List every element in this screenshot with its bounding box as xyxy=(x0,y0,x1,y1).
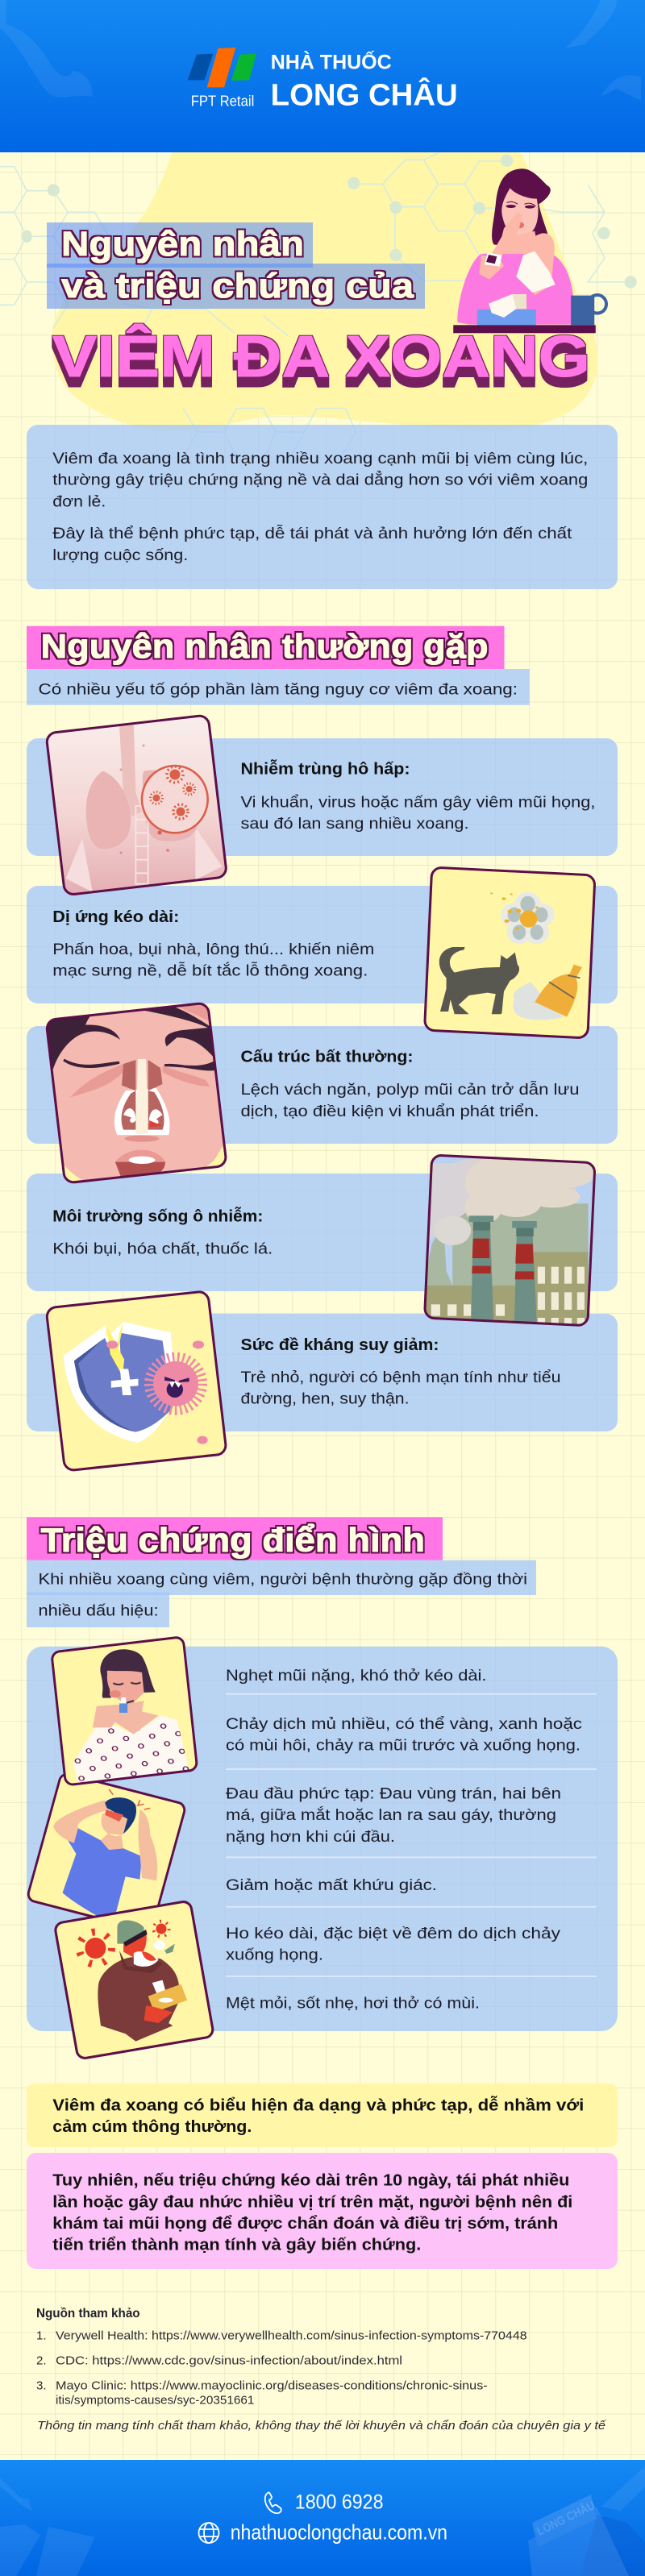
cause 2 text xyxy=(52,908,374,980)
symptoms lead-in xyxy=(27,1560,536,1627)
cause 3 text: dịch, tạo điều kiện vi khuẩn phát triển. xyxy=(240,1103,539,1120)
symptom: smell loss: Giảm hoặc mất khứu giác. xyxy=(226,1876,437,1894)
cause 4 text: Khói bụi, hóa chất, thuốc lá. xyxy=(52,1240,273,1258)
icon: infected lungs xyxy=(45,714,227,895)
cause 1 text: sau đó lan sang nhiều xoang. xyxy=(240,815,469,833)
callout: pink warning xyxy=(27,2153,618,2269)
callout: pink warning: khám tai mũi họng để được chẩn đoán và điều trị sớm, tránh xyxy=(52,2215,558,2233)
brand name: LONG CHÂU xyxy=(271,77,458,113)
references: 2. xyxy=(36,2354,47,2368)
cause 2 text: Dị ứng kéo dài: xyxy=(52,908,179,926)
causes lead-in: Có nhiều yếu tố góp phần làm tăng nguy cơ viêm đa xoang: xyxy=(39,681,518,699)
cause 3 text: Cấu trúc bất thường: xyxy=(240,1048,413,1066)
icon: woman using nasal spray xyxy=(51,1636,198,1786)
callout: yellow note: cảm cúm thông thường. xyxy=(52,2118,252,2136)
brand name xyxy=(271,50,458,113)
symptom: headache: nặng hơn khi cúi đầu. xyxy=(226,1828,395,1846)
symptom: headache: má, giữa mắt hoặc lan ra sau gáy, thường xyxy=(226,1805,556,1824)
title line 1: Nguyên nhân xyxy=(61,225,304,264)
heading: causes: Nguyên nhân thường gặp xyxy=(40,627,489,665)
heading: symptoms: Triệu chứng điển hình xyxy=(40,1521,425,1559)
cause 4 text xyxy=(52,1207,273,1258)
callout: pink warning: lần hoặc gây đau nhức nhiều vị trí trên mặt, người bệnh nên đi xyxy=(52,2193,572,2211)
intro text: thường gây triệu chứng nặng nề và dai dẳng hơn so với viêm xoang xyxy=(52,470,588,489)
phone number: 1800 6928 xyxy=(295,2491,384,2514)
decorative store: LONG CHÂU xyxy=(535,2498,597,2539)
symptom: cough xyxy=(226,1925,560,1964)
references xyxy=(36,2307,607,2433)
symptoms lead-in: Khi nhiều xoang cùng viêm, người bệnh thường gặp đồng thời xyxy=(39,1571,527,1589)
symptom: headache xyxy=(226,1785,561,1846)
cause 5 text xyxy=(240,1336,561,1408)
cause 3 text: Lệch vách ngăn, polyp mũi cản trở dẫn lưu xyxy=(240,1080,579,1099)
hexagon network decoration xyxy=(0,153,637,470)
title highlight boxes xyxy=(47,222,425,309)
footer band xyxy=(0,2460,645,2576)
logo: FPT Retail xyxy=(188,48,256,110)
icon: polluting factory xyxy=(424,1154,596,1327)
callout: yellow note: Viêm đa xoang có biểu hiện đa dạng và phức tạp, dễ nhầm với xyxy=(52,2095,584,2114)
symptom: fatigue: Mệt mỏi, sốt nhẹ, hơi thở có mùi. xyxy=(226,1995,480,2013)
icon: broken shield and virus xyxy=(46,1291,227,1471)
intro text: Viêm đa xoang là tình trạng nhiều xoang cạnh mũi bị viêm cùng lúc, xyxy=(52,450,588,467)
intro text: đơn lẻ. xyxy=(52,492,106,510)
brand name: NHÀ THUỐC xyxy=(271,50,392,74)
illustration: sick woman with tissue xyxy=(453,168,606,333)
panel: cause 5 background xyxy=(27,1314,618,1431)
icon: allergens (flower, cat, broom) xyxy=(424,866,596,1039)
callout: pink warning: Tuy nhiên, nếu triệu chứng kéo dài trên 10 ngày, tái phát nhiều xyxy=(52,2172,569,2190)
panel: cause 4 background xyxy=(27,1174,618,1291)
icon: nasal anatomy face xyxy=(45,1003,227,1183)
header band xyxy=(0,0,645,152)
cause 5 text: Sức đề kháng suy giảm: xyxy=(240,1336,439,1354)
icon: coughing man with virus xyxy=(54,1901,214,2059)
symptom: discharge xyxy=(226,1715,582,1755)
icon: headache man xyxy=(27,1773,185,1917)
intro text xyxy=(52,450,588,564)
references: itis/symptoms-causes/syc-20351661 xyxy=(56,2393,254,2407)
symptom: cough: Ho kéo dài, đặc biệt về đêm do dịch chảy xyxy=(226,1925,560,1942)
icon: globe xyxy=(198,2523,219,2543)
references: CDC: https://www.cdc.gov/sinus-infection/about/index.html xyxy=(56,2354,402,2368)
references: 3. xyxy=(36,2379,47,2393)
cause 1 text xyxy=(240,759,595,833)
logo: FPT Retail: FPT Retail xyxy=(191,93,254,110)
cause 2 text: mạc sưng nề, dễ bít tắc lỗ thông xoang. xyxy=(52,962,368,980)
yellow hero blob xyxy=(52,152,598,430)
hero title xyxy=(47,222,590,389)
symptom list xyxy=(226,1667,597,2013)
intro text: Đây là thể bệnh phức tạp, dễ tái phát và ảnh hưởng lớn đến chất xyxy=(52,524,572,542)
decorative store xyxy=(528,2495,629,2576)
panel: intro xyxy=(27,425,618,589)
symptom: nasal congestion: Nghẹt mũi nặng, khó thở kéo dài. xyxy=(226,1667,487,1685)
panel: symptoms xyxy=(27,1647,618,2031)
cause 1 text: Vi khuẩn, virus hoặc nấm gây viêm mũi họng, xyxy=(240,794,595,812)
title line 2: và triệu chứng của xyxy=(61,267,414,305)
cause 2 text: Phấn hoa, bụi nhà, lông thú... khiến niêm xyxy=(52,941,374,958)
symptom: headache: Đau đầu phức tạp: Đau vùng trán, hai bên xyxy=(226,1785,561,1803)
icon: phone xyxy=(265,2492,281,2513)
symptom: discharge: có mùi hôi, chảy ra mũi trước và xuống họng. xyxy=(226,1737,580,1755)
website: nhathuoclongchau.com.vn xyxy=(231,2520,447,2545)
title main: VIÊM ĐA XOANG: VIÊM ĐA XOANG xyxy=(52,324,590,389)
cause 5 text: Trẻ nhỏ, người có bệnh mạn tính như tiểu xyxy=(240,1369,561,1386)
causes lead-in xyxy=(27,669,530,705)
callout: yellow note xyxy=(27,2084,618,2147)
disclaimer: Thông tin mang tính chất tham khảo, không thay thế lời khuyên và chẩn đoán của chuyên gia y tế xyxy=(37,2419,607,2433)
panel: cause 3 background xyxy=(27,1026,618,1144)
cause 3 text xyxy=(240,1048,579,1120)
panel: cause 2 background xyxy=(27,886,618,1003)
callout: pink warning: tiến triển thành mạn tính và gây biến chứng. xyxy=(52,2237,421,2254)
symptom: discharge: Chảy dịch mủ nhiều, có thể vàng, xanh hoặc xyxy=(226,1715,582,1733)
symptom: cough: xuống họng. xyxy=(226,1947,323,1964)
cause 4 text: Môi trường sống ô nhiễm: xyxy=(52,1207,263,1226)
panel: cause 1 background xyxy=(27,738,618,856)
cause 5 text: đường, hen, suy thận. xyxy=(240,1390,410,1408)
intro text: lượng cuộc sống. xyxy=(52,546,188,564)
references: Verywell Health: https://www.verywellhealth.com/sinus-infection-symptoms-770448 xyxy=(56,2329,527,2342)
symptoms lead-in: nhiều dấu hiệu: xyxy=(39,1602,158,1620)
references: Mayo Clinic: https://www.mayoclinic.org/diseases-conditions/chronic-sinus- xyxy=(56,2379,488,2393)
references: Nguồn tham khảo xyxy=(36,2307,140,2320)
cause 1 text: Nhiễm trùng hô hấp: xyxy=(240,759,410,779)
references: 1. xyxy=(36,2329,47,2342)
